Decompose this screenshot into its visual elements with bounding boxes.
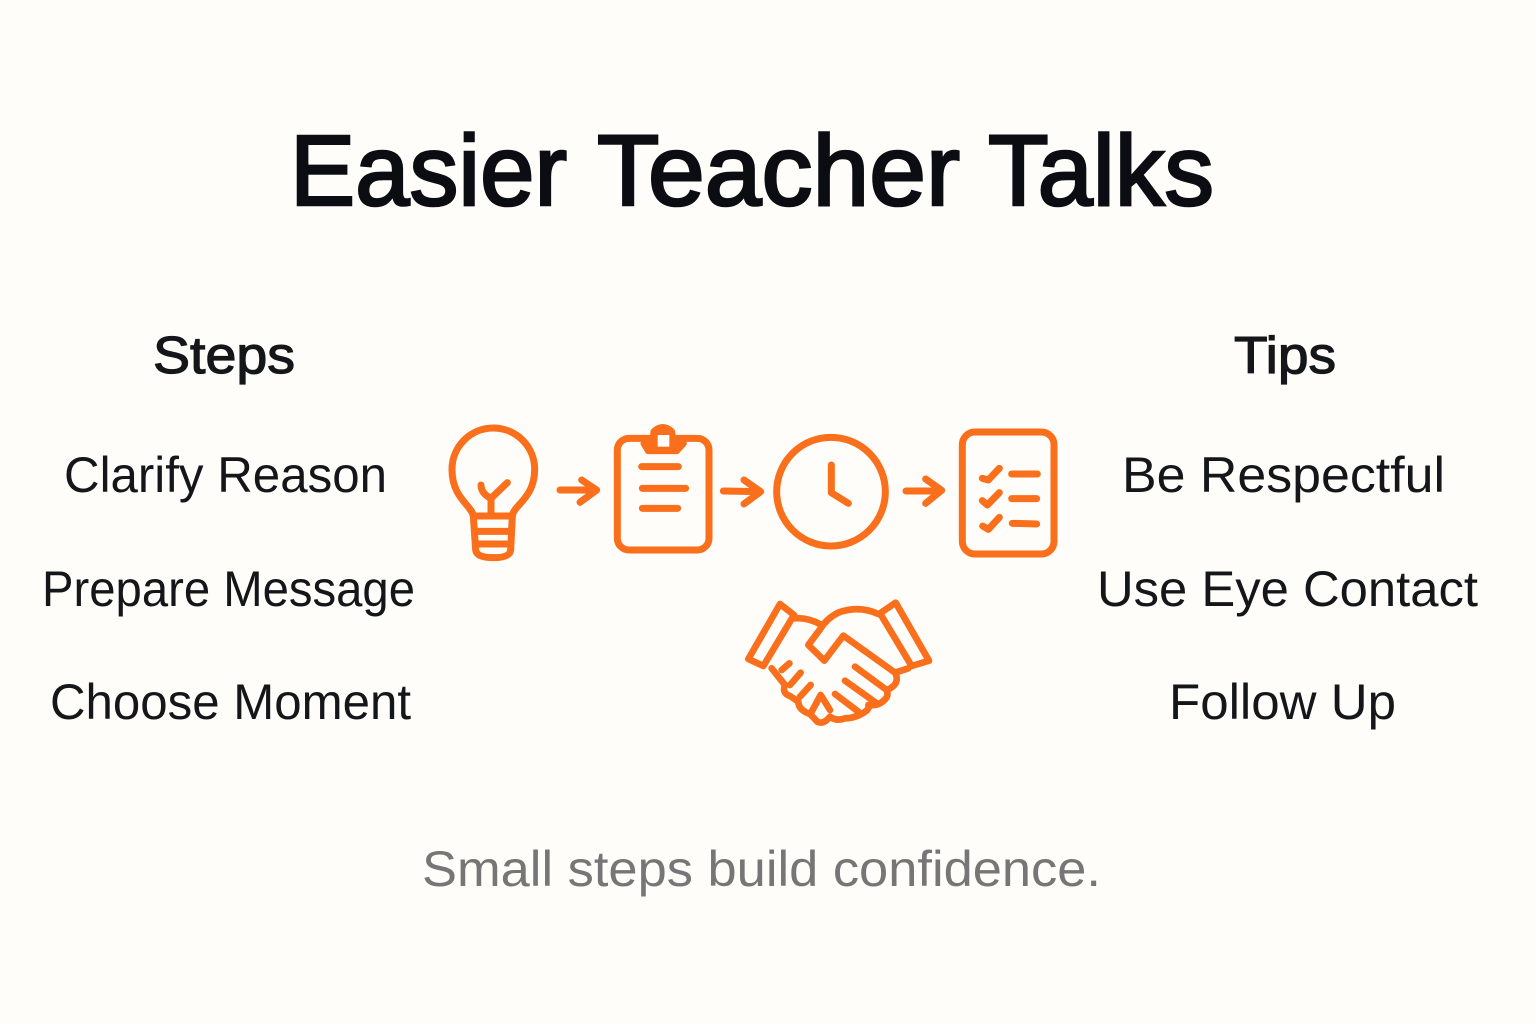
icon: checklist bbox=[962, 432, 1054, 554]
step: choose moment: Choose Moment bbox=[50, 674, 411, 730]
icon: clipboard bbox=[617, 427, 709, 550]
tip: follow up: Follow Up bbox=[1169, 674, 1396, 730]
title: Talks bbox=[988, 115, 1214, 227]
arrow: clock to checklist bbox=[906, 479, 942, 503]
icon: clock bbox=[777, 437, 885, 546]
panel: steps bbox=[42, 327, 415, 730]
footer tagline: Small steps build confidence. bbox=[422, 841, 1101, 897]
panel: tips bbox=[1097, 327, 1478, 730]
tip: be respectful: Be Respectful bbox=[1122, 447, 1445, 503]
icon: handshake bbox=[748, 603, 929, 723]
title: Teacher bbox=[597, 115, 960, 227]
title: Easier bbox=[290, 115, 567, 227]
arrow: clipboard to clock bbox=[723, 480, 761, 504]
heading: steps: Steps bbox=[153, 327, 295, 385]
tip: use eye contact: Use Eye Contact bbox=[1097, 561, 1478, 617]
step: clarify reason: Clarify Reason bbox=[64, 447, 387, 503]
heading: tips: Tips bbox=[1234, 327, 1336, 385]
step: prepare message: Prepare Message bbox=[42, 561, 415, 617]
arrow: bulb to clipboard bbox=[560, 480, 597, 502]
icon: light bulb bbox=[452, 428, 535, 558]
